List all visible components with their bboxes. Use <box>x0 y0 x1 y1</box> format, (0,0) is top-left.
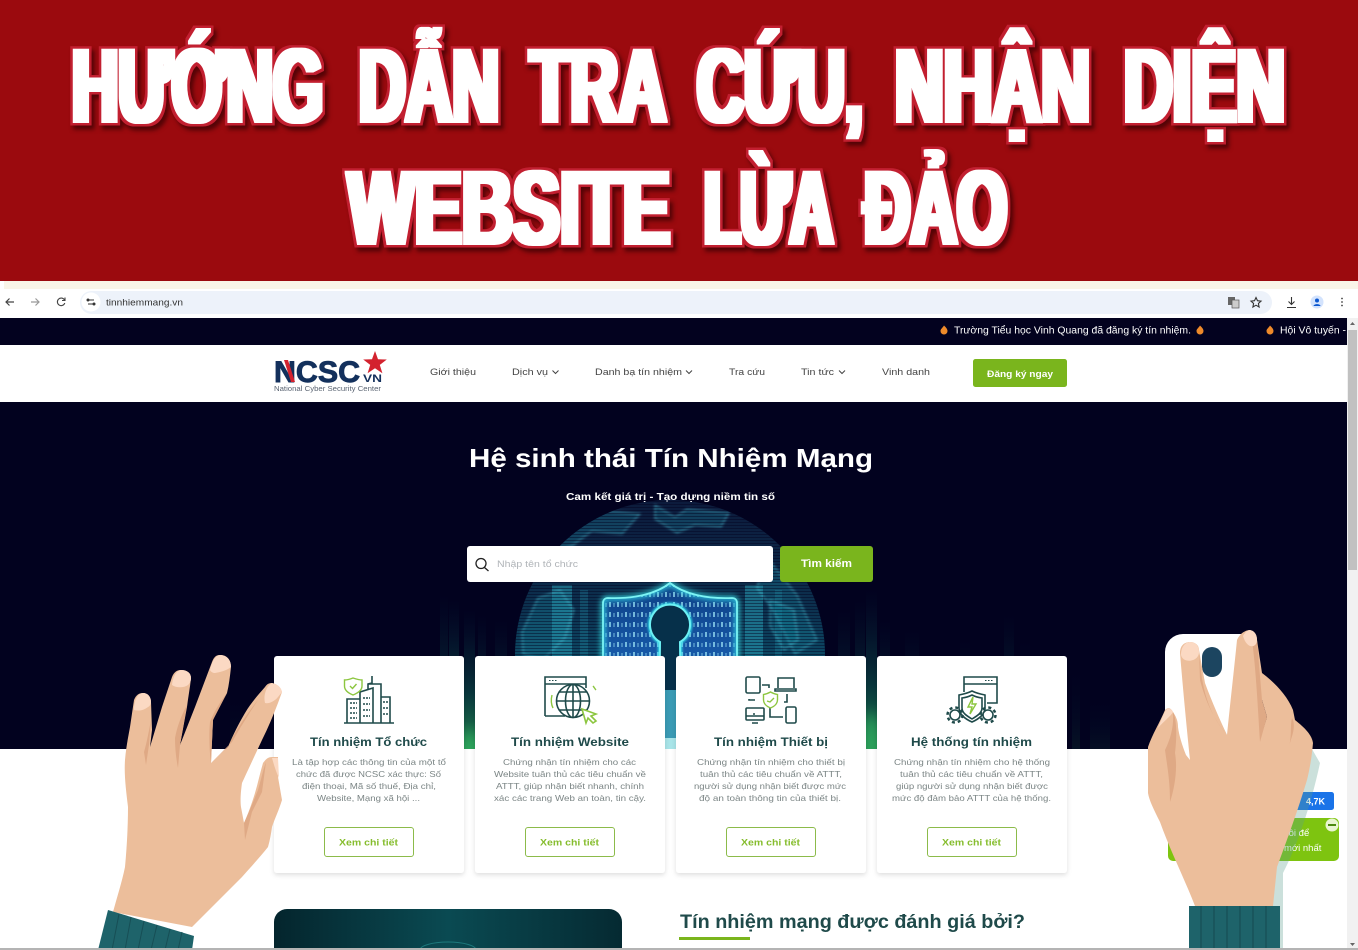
card description: chức đã được NCSC xác thực: Số <box>296 769 441 779</box>
card description: độ an toàn thông tin của thiết bị. <box>699 793 841 803</box>
logo: NCSC <box>274 356 360 389</box>
card description: tuân thủ các tiêu chuẩn về ATTT, <box>900 769 1043 779</box>
teal evaluation image <box>274 909 622 950</box>
icon: profile <box>1310 296 1324 308</box>
title line 2: ĐẢO <box>864 148 1007 267</box>
card description: người sử dụng nhận biết được mức <box>694 781 847 791</box>
icon: download <box>1287 297 1296 308</box>
card description: Chứng nhận tín nhiệm cho hệ thống <box>894 757 1050 767</box>
icon: buildings with shield <box>344 676 394 723</box>
detail button: Xem chi tiết <box>540 838 600 848</box>
detail button <box>526 828 614 856</box>
mouse body <box>1165 634 1245 772</box>
url: tinnhiemmang.vn <box>106 298 183 308</box>
card description: xác các trang Web an toàn, tin cậy. <box>494 793 646 803</box>
browser toolbar <box>0 281 1358 318</box>
icon: flame <box>1196 326 1204 335</box>
card description <box>292 757 446 803</box>
card description: tuân thủ các tiêu chuẩn về ATTT, <box>700 769 842 779</box>
hero section <box>0 402 1347 749</box>
icon: star <box>1251 298 1261 307</box>
card description: Chứng nhận tín nhiệm cho các <box>503 757 637 767</box>
mouse wheel <box>1202 647 1222 677</box>
icon: translate <box>1228 297 1239 308</box>
logo: National Cyber Security Center <box>274 386 382 393</box>
hero subtitle: Cam kết giá trị - Tạo dựng niềm tin số <box>566 491 776 503</box>
card description: Là tập hợp các thông tin của một tổ <box>292 757 446 767</box>
nav items: Tra cứu <box>729 367 765 378</box>
scrollbar <box>1347 318 1358 950</box>
icon: flame <box>1266 326 1274 335</box>
nav items: Vinh danh <box>882 367 930 378</box>
title banner <box>0 0 1358 281</box>
fingernails <box>134 655 282 778</box>
card description: mức độ đảm bảo ATTT của hệ thống. <box>892 793 1051 803</box>
panel: Tín nhiệm Website <box>475 656 665 873</box>
card description: Website, Mạng xã hội ... <box>317 793 420 803</box>
card description: điện thoại, Mã số thuế, Địa chỉ, <box>302 781 436 791</box>
title line 2: LỪA <box>704 150 833 267</box>
detail button: Xem chi tiết <box>942 838 1002 848</box>
hand shape <box>113 655 282 927</box>
mouse inner shadow <box>1208 695 1227 760</box>
fingernails <box>1158 630 1257 728</box>
dark slit between fingers <box>1262 700 1267 733</box>
finger shadows <box>144 693 266 840</box>
icon: connected devices <box>746 677 796 723</box>
icon: magnifier <box>476 558 488 571</box>
card title: Tín nhiệm Tổ chức <box>310 737 428 749</box>
card title: Hệ thống tín nhiệm <box>911 737 1032 749</box>
nav items: Dịch vụ <box>512 367 548 378</box>
logo <box>274 351 387 393</box>
register button: Đăng ký ngay <box>987 369 1054 380</box>
ticker text: Hội Vô tuyến - <box>1280 324 1346 336</box>
title line 1: HƯỚNG <box>72 28 323 145</box>
panel: Tín nhiệm Thiết bị <box>676 656 866 873</box>
sleeve <box>98 910 194 950</box>
icon: menu dots <box>1341 298 1343 306</box>
title line 1: CỨU, <box>697 28 863 145</box>
ticker bar <box>0 318 1347 345</box>
hero heading: Hệ sinh thái Tín Nhiệm Mạng <box>469 443 873 473</box>
nav items: Tin tức <box>801 367 834 378</box>
card description: ATTT, giúp nhận biết nhanh, chính <box>496 781 644 791</box>
icon: website globe with cursor <box>545 677 596 723</box>
icon: flame <box>940 326 948 335</box>
detail button: Xem chi tiết <box>339 838 399 848</box>
illustration: mouse and right hand <box>1148 630 1320 950</box>
detail button: Xem chi tiết <box>741 838 801 848</box>
nav items <box>430 367 930 378</box>
rating chip <box>1177 770 1334 810</box>
hand shape <box>1148 630 1313 906</box>
card description <box>494 757 646 803</box>
navigation bar <box>0 345 1347 402</box>
card description: Chứng nhận tín nhiệm cho thiết bị <box>697 757 845 767</box>
detail button <box>324 828 414 856</box>
logo: VN <box>363 373 382 385</box>
icon: reload <box>57 298 65 306</box>
panel: Hệ thống tín nhiệm <box>877 656 1067 873</box>
chat bubble: tôi để <box>1286 828 1309 839</box>
icon: site settings <box>82 292 100 312</box>
title line 1: TRA <box>530 28 666 145</box>
hero artwork: globe and shield <box>230 500 1110 810</box>
mouse shadow <box>1270 700 1320 948</box>
ticker text: Trường Tiểu học Vinh Quang đã đăng ký tín nhiệm. <box>954 324 1191 336</box>
card description: giúp người sử dụng nhận biết được <box>896 781 1049 791</box>
card description <box>892 757 1051 803</box>
nav items: Danh bạ tín nhiệm <box>595 367 682 378</box>
icon: forward <box>31 298 39 306</box>
detail button <box>726 828 816 856</box>
icon: back <box>6 298 14 306</box>
card title: Tín nhiệm Thiết bị <box>714 737 828 749</box>
chat bubble <box>1168 818 1339 861</box>
detail button <box>928 828 1016 856</box>
chat bubble: mới nhất <box>1284 843 1322 854</box>
card description <box>694 757 847 803</box>
finger shadows <box>1165 640 1294 802</box>
panel: Tín nhiệm Tổ chức <box>274 656 464 873</box>
title line 1: DẪN <box>359 26 499 145</box>
card description: Website tuân thủ các tiêu chuẩn về <box>494 769 646 779</box>
section heading: Tín nhiệm mạng được đánh giá bởi? <box>680 912 1025 933</box>
page bottom edge <box>0 948 1358 950</box>
search input <box>467 546 773 582</box>
search input: Nhập tên tổ chức <box>497 559 579 569</box>
icon: system shield with gears <box>948 677 997 722</box>
title line 2: WEBSITE <box>348 150 670 267</box>
rating chip: 4,7K <box>1306 796 1326 806</box>
title line 1: NHẬN <box>895 27 1090 145</box>
title line 1 <box>72 26 1285 145</box>
register button <box>973 359 1067 387</box>
search button: Tìm kiếm <box>801 558 852 570</box>
sleeve <box>1189 906 1280 950</box>
search button <box>780 546 873 582</box>
illustration: left hand <box>98 655 282 950</box>
card title: Tín nhiệm Website <box>511 737 629 749</box>
nav items: Giới thiệu <box>430 367 476 378</box>
